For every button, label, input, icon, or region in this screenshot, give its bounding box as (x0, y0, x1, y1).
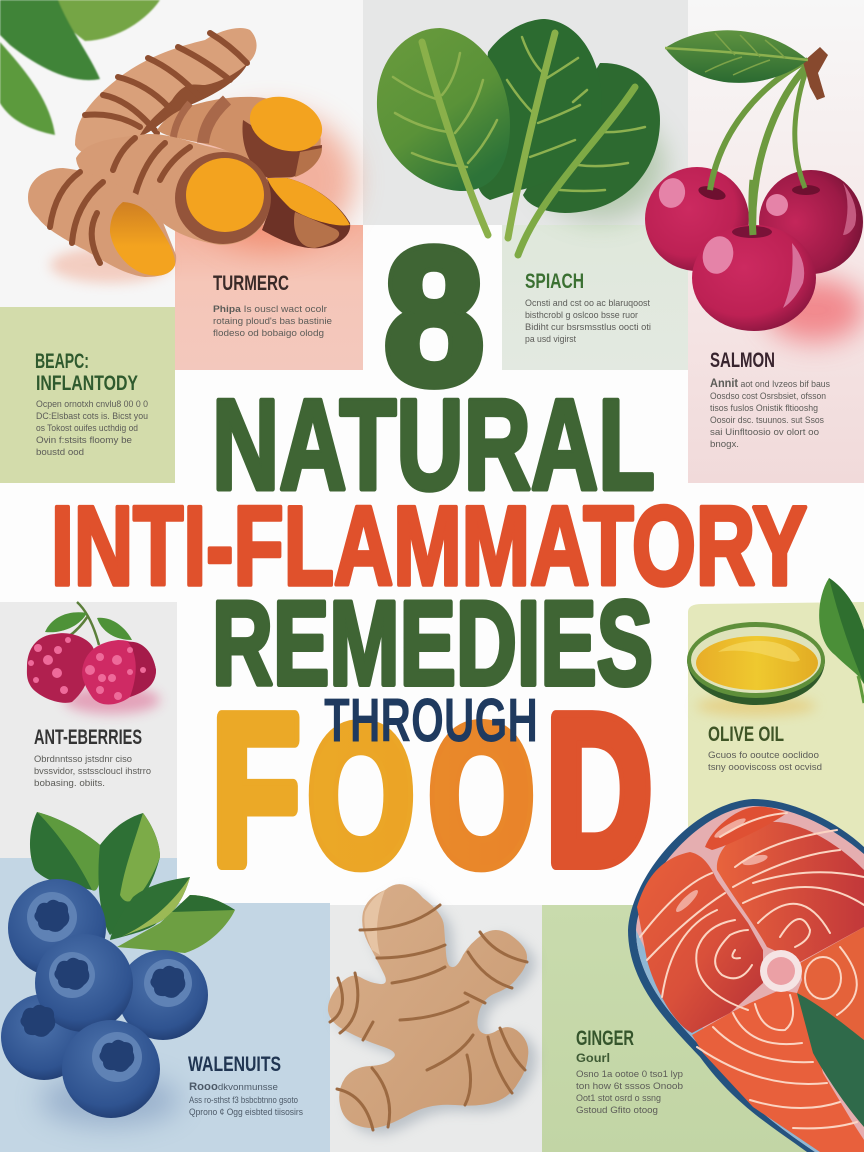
text: spinach body: bisthcrobl g oslcoo bsse ruor (525, 310, 638, 321)
icon: corner leaves (0, 0, 160, 135)
panel: spinach image backdrop (363, 0, 688, 225)
text: ginger body: ton how 6t sssos Onoob (576, 1081, 683, 1092)
title word: food: O (429, 686, 534, 906)
text: salmon body: sai Uinfltoosio ov olort oo (710, 427, 819, 438)
panel: beneficial anti-inflammatory (0, 307, 175, 483)
text: panel body: boustd ood (36, 447, 84, 458)
title line: natural: NATURAL (212, 373, 655, 517)
text: ginger body: Oot1 stot osrd o ssng (576, 1093, 661, 1104)
text: antiberries body (34, 754, 151, 789)
text: salmon body: Oosdso cost Osrsbsiet, ofsson (710, 391, 826, 402)
illustration: turmeric (28, 28, 355, 283)
illustration: cherries (645, 30, 864, 342)
heading: salmon: SALMON (710, 349, 775, 372)
text: salmon body: Annit aot ond Ivzeos bif baus (710, 376, 830, 390)
title: main heading (51, 208, 807, 908)
text: spinach body: pa usd vigirst (525, 334, 576, 345)
title line: remedies: REMEDIES (212, 576, 653, 710)
panel: top left backdrop (0, 0, 363, 307)
panel: walnuts (0, 858, 330, 1152)
text: walnuts body (189, 1081, 303, 1118)
text: turmeric body: Phipa Is ouscl wact ocolr (213, 304, 327, 315)
text: antiberries body: bobasing. obiits. (34, 778, 105, 789)
text: ginger subheading: Gourl (576, 1051, 610, 1065)
title word: food: F (212, 671, 300, 908)
heading: ginger: GINGER (576, 1027, 634, 1050)
panel: ginger image backdrop (330, 905, 542, 1152)
illustration: raspberries (27, 602, 160, 714)
panel: salmon (688, 0, 864, 483)
illustration: ginger root (328, 884, 536, 1134)
text: panel body: os Tokost ouifes ucthdig od (36, 423, 138, 434)
text: antiberries body: Obrdnntsso jstsdnr ciso (34, 754, 132, 765)
text: ginger body (576, 1069, 683, 1116)
text: turmeric body: flodeso od bobaigo olodg (213, 328, 324, 339)
text: antiberries body: bvssvidor, sstsscloucl ihstrro (34, 766, 151, 777)
title word: food (212, 671, 652, 908)
heading: walnuts: WALENUITS (188, 1053, 281, 1076)
title numeral: 8: 8 (384, 208, 484, 424)
text: spinach body (525, 298, 651, 345)
text: olive oil body: Gcuos fo ooutce ooclidoo (708, 750, 819, 761)
heading: antiberries: ANT-EBERRIES (34, 726, 142, 749)
title word: food: O (308, 686, 414, 906)
text: spinach body: Bidiht cur bsrsmsstlus oocti oti (525, 322, 651, 333)
text: panel body: Ocpen ornotxh cnvlu8 00 0 0 (36, 399, 148, 410)
heading: spinach: SPIACH (525, 270, 584, 293)
panel: ginger (542, 905, 864, 1152)
illustration: spinach (377, 19, 665, 255)
illustration: olive oil bowl (687, 578, 864, 716)
text: salmon body (710, 376, 830, 450)
panel: antiberries (0, 602, 177, 858)
text: walnuts body: Qprono ¢ Ogg eisbted tiisosirs (189, 1107, 303, 1118)
text: walnuts body: Ass ro-sthst f3 bsbcbtnno gsoto (189, 1095, 298, 1106)
title word: food: D (546, 671, 652, 908)
text: panel body (36, 399, 148, 458)
text: salmon body: tisos fuslos Onistik fltiooshg (710, 403, 818, 414)
text: panel body: DC:Elsbast cots is. Bicst you (36, 411, 148, 422)
illustration: blueberries (1, 812, 235, 1125)
illustration: salmon steak (628, 799, 864, 1152)
panel: turmeric (175, 225, 363, 370)
text: turmeric body: rotaing ploud's bas bastinie (213, 316, 332, 327)
text: walnuts body: Rooodkvonmunsse (189, 1081, 278, 1093)
text: olive oil body (708, 750, 822, 773)
panel: beneficial anti-inflammatory: INFLANTODY (36, 372, 138, 395)
panel: olive oil (688, 602, 864, 905)
text: salmon body: bnogx. (710, 439, 739, 450)
title line: through: THROUGH (324, 686, 538, 756)
text: olive oil body: tsny oooviscoss ost ocvisd (708, 762, 822, 773)
text: panel body: Ovin f:stsits floomy be (36, 435, 132, 446)
text: salmon body: Oosoir dsc. tsuunos. sut Ssos (710, 415, 824, 426)
text: ginger body: Osno 1a ootoe 0 tso1 lyp (576, 1069, 683, 1080)
heading: panel title: BEAPC: (35, 350, 89, 373)
heading: turmeric: TURMERC (213, 272, 289, 295)
text: turmeric body (213, 304, 332, 339)
panel: spinach (502, 225, 688, 370)
text: ginger body: Gstoud Gfito otoog (576, 1105, 658, 1116)
text: spinach body: Ocnsti and cst oo ac blaruqoost (525, 298, 650, 309)
heading: olive oil: OLIVE OIL (708, 723, 784, 746)
